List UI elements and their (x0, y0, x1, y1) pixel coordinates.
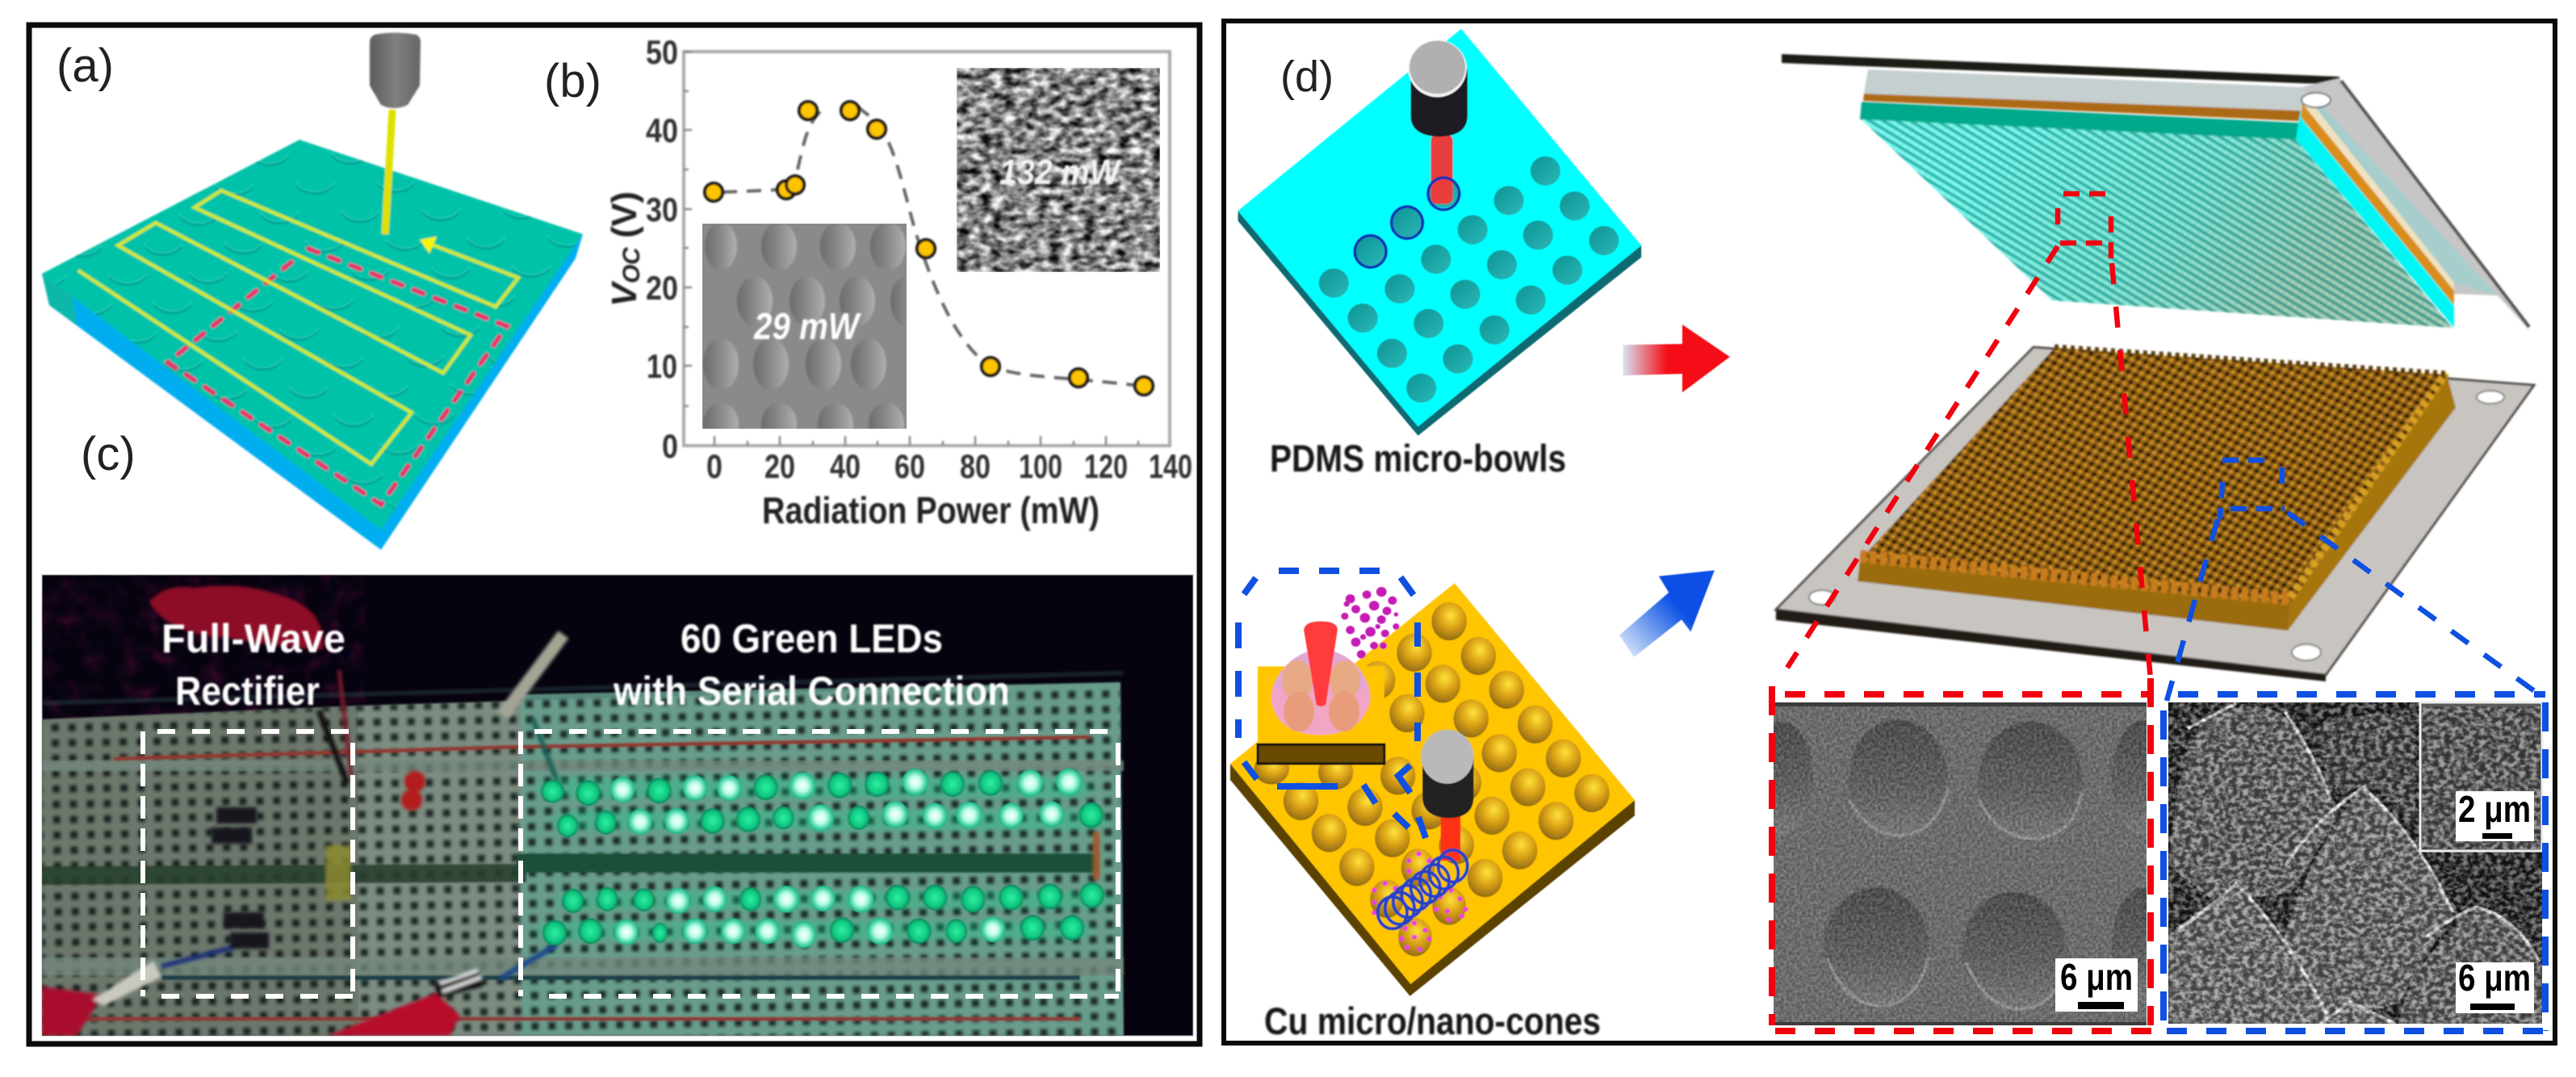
label: (d): (d) (1280, 52, 1334, 101)
y tick labels: 30 (646, 191, 678, 228)
x tick labels: 20 (764, 447, 795, 485)
PDMS micro-bowl plate schematic (1238, 29, 1641, 436)
inset SEM with scale bar 2 μm: 2 μm (2458, 788, 2531, 830)
SEM image: PDMS micro-bowls (1774, 702, 2147, 1025)
ablated particle cloud (1341, 587, 1399, 659)
y axis title: OC (618, 246, 645, 283)
photo details: clips, wires, parts (42, 586, 1096, 1036)
photo label: rectifier: Rectifier (175, 668, 320, 714)
label: (a): (a) (57, 40, 114, 92)
photo label: LEDs (613, 616, 1010, 714)
dashed trend line (723, 107, 1134, 385)
rectifier dashed box (143, 731, 354, 996)
panel: right frame (d) (1224, 21, 2555, 1043)
x tick labels: 40 (830, 447, 861, 485)
chart b: Voc versus radiation power (605, 33, 1192, 531)
red dashed magnifier connectors (1787, 194, 2151, 679)
y axis title: (V) (605, 191, 644, 248)
blue dashed magnifier connectors (2167, 460, 2545, 701)
upper device: PDMS layer on plate (1782, 54, 2529, 329)
LED dashed box (521, 731, 1119, 996)
scale bar 6 μm: 6 μm (2060, 956, 2133, 998)
photo label: LEDs: with Serial Connection (613, 668, 1010, 714)
y tick labels: 40 (646, 111, 678, 149)
y tick labels: 10 (647, 347, 677, 385)
scale bar 6 μm: 6 μm (2458, 957, 2531, 999)
photo label: rectifier (161, 616, 346, 714)
panel a: laser scan schematic (42, 32, 583, 550)
x tick labels: 120 (1084, 447, 1128, 485)
label: (b): (b) (544, 55, 601, 107)
y tick labels (646, 33, 678, 465)
y tick labels: 50 (646, 33, 678, 71)
inset SEM: 132 mW: 132 mW (999, 153, 1122, 192)
panel: left frame (a, b, c) (29, 25, 1200, 1044)
photo label: LEDs: 60 Green LEDs (681, 616, 943, 661)
blue dashed magnifier outline (1238, 571, 1426, 838)
arrow: blue (1619, 570, 1715, 657)
micro-bowl crescents (42, 140, 583, 530)
photo label: rectifier: Full-Wave (161, 616, 346, 661)
y tick labels: 20 (646, 269, 678, 307)
x tick labels: 60 (894, 447, 925, 485)
scale bar 6 μm (2456, 957, 2534, 1013)
laser beam (385, 110, 392, 234)
lower device: Cu cones on plate (1776, 347, 2534, 681)
pink dashed region (168, 249, 507, 505)
x tick labels: 100 (1019, 447, 1062, 485)
panel c: LED breadboard photo (42, 575, 1193, 1036)
breadboard (42, 671, 1124, 1036)
inset SEM with scale bar 2 μm (2420, 702, 2542, 851)
SEM image: Cu micro-cones (2168, 702, 2542, 1024)
laser beam and scan coil (1441, 814, 1460, 861)
x tick labels: 80 (960, 447, 991, 485)
laser head (1422, 756, 1473, 818)
caption: PDMS micro-bowls: PDMS micro-bowls (1270, 437, 1566, 480)
x tick labels: 140 (1149, 447, 1192, 485)
60 green LEDs (537, 769, 1112, 948)
y tick labels: 0 (662, 427, 678, 465)
inset SEM: 29 mW (702, 224, 907, 429)
yellow scan path (78, 191, 518, 464)
inset SEM: 29 mW: 29 mW (753, 305, 861, 347)
x tick labels: 0 (706, 447, 723, 485)
chart frame (684, 52, 1170, 446)
micro-bowl lattice (1862, 119, 2452, 328)
plasma dome (1271, 649, 1371, 735)
label: (c): (c) (81, 428, 136, 480)
laser nozzle (370, 32, 421, 108)
red dashed box (1772, 678, 2152, 1031)
caption: Cu micro/nano-cones: Cu micro/nano-cones (1264, 999, 1601, 1042)
y axis title: V (605, 280, 644, 307)
nano-decorated cones (1370, 849, 1468, 956)
data markers (705, 102, 1153, 395)
scan direction arrow (420, 237, 437, 254)
magnified inset block (1258, 666, 1384, 744)
x axis title: Radiation Power (mW) (762, 489, 1100, 531)
blue dashed box (2163, 694, 2545, 1031)
plate top surface (42, 140, 583, 530)
x tick labels (706, 447, 1192, 485)
cone array (1860, 348, 2447, 603)
Cu micro/nano-cone plate schematic (1230, 583, 1635, 996)
arrow: red (1623, 325, 1730, 392)
inset SEM: 132 mW (957, 68, 1160, 272)
scale bar 6 μm (2055, 956, 2138, 1012)
